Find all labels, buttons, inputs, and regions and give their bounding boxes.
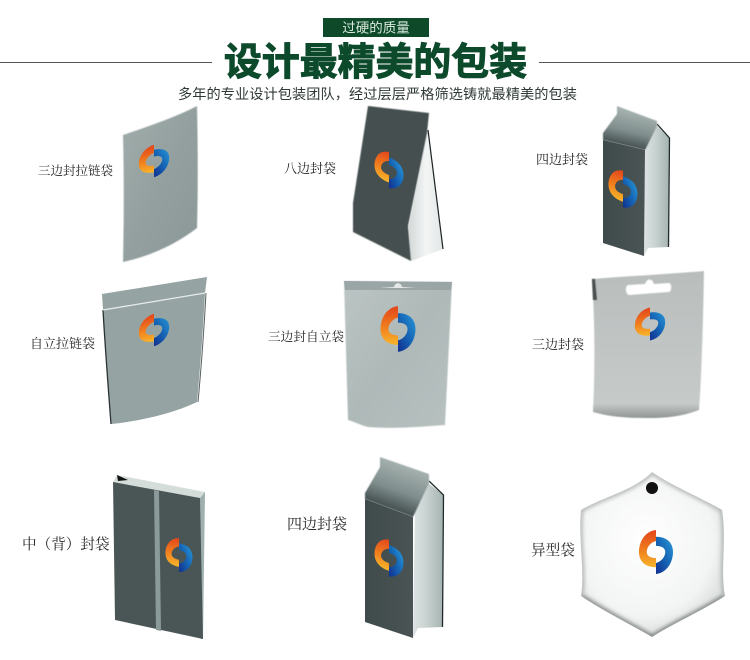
- top gusset: [365, 457, 429, 517]
- panel: centre back seal bag: [22, 475, 205, 639]
- hang hole: [380, 283, 416, 288]
- light gusset: [644, 126, 669, 256]
- label: 中（背）封袋: [22, 535, 110, 553]
- header badge: 过硬的质量: [342, 20, 410, 36]
- label: 三边封自立袋: [268, 329, 344, 344]
- label: 四边封袋: [287, 515, 347, 533]
- label: 八边封袋: [284, 161, 336, 176]
- right edge: [200, 492, 205, 639]
- white gusset: [409, 130, 443, 261]
- title rule right: [539, 62, 750, 63]
- left dark edge: [103, 310, 111, 424]
- panel: shaped hexagon bag: [531, 468, 731, 640]
- header badge: [323, 18, 429, 37]
- panel: eight-side bag: [284, 106, 443, 261]
- bag body: [102, 277, 207, 424]
- zipper line: [103, 293, 205, 310]
- logo: [165, 536, 193, 574]
- subtitle: 多年的专业设计包装团队，经过层层严格筛选铸就最精美的包装: [178, 86, 577, 103]
- logo: [374, 147, 404, 193]
- logo: [139, 310, 169, 350]
- dark body: [113, 482, 203, 639]
- dark face: [603, 140, 645, 256]
- top gusset: [603, 106, 657, 150]
- logo: [608, 166, 638, 212]
- bag body: [344, 281, 452, 428]
- panel: four-side bag bottom: [287, 457, 444, 638]
- panel: three-side zipper bag: [38, 106, 198, 262]
- top fold: [113, 475, 205, 498]
- logo: [381, 306, 415, 352]
- left dark corner: [592, 279, 597, 300]
- black fold triangle: [117, 475, 128, 481]
- dark face: [365, 499, 413, 638]
- panel: stand-up zipper bag: [30, 277, 207, 424]
- hang hole: [646, 482, 658, 494]
- black edge: [428, 130, 443, 249]
- logo: [639, 530, 673, 574]
- panel: three-side stand-up bag: [268, 281, 452, 428]
- black edge: [429, 481, 444, 627]
- logo: [635, 305, 665, 343]
- logo: [374, 535, 404, 581]
- bag body: [592, 271, 704, 418]
- label: 三边封拉链袋: [38, 163, 114, 178]
- hexagon body: [580, 472, 725, 637]
- black edge: [657, 124, 670, 247]
- label: 异型袋: [531, 541, 575, 559]
- seal band: [344, 281, 452, 290]
- label: 三边封袋: [532, 337, 584, 352]
- dark face: [353, 106, 429, 261]
- back seal strip: [154, 490, 161, 631]
- handle slot: [626, 280, 671, 295]
- logo: [139, 142, 169, 180]
- light gusset: [413, 483, 443, 638]
- label: 四边封袋: [536, 152, 588, 167]
- label: 自立拉链袋: [30, 336, 95, 351]
- title rule left: [0, 62, 212, 63]
- right dark edge: [198, 293, 206, 402]
- panel: four-side bag top right: [536, 106, 670, 256]
- bag body: [123, 106, 198, 262]
- main title: 设计最精美的包装: [224, 42, 527, 84]
- panel: three-side bag: [532, 271, 704, 418]
